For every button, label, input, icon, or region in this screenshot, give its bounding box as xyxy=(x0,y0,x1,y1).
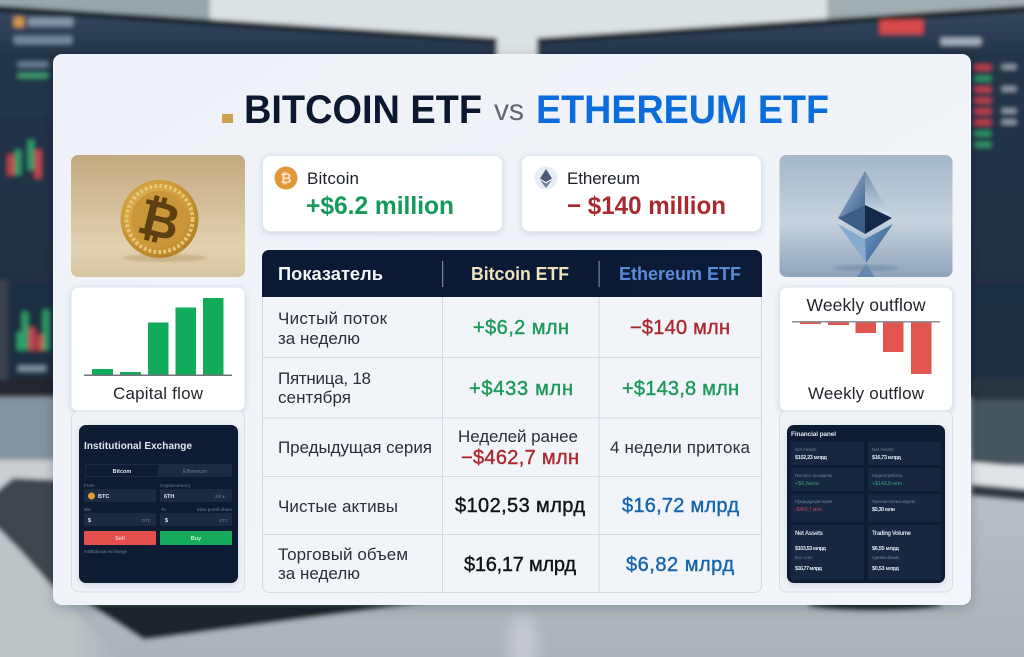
row: weekly trading volume: $16,17 млрд xyxy=(464,554,576,576)
row: weekly trading volume: $6,82 млрд xyxy=(626,554,734,576)
bars xyxy=(92,298,224,375)
card: financial panel screenshot: +$6,6млн xyxy=(795,481,819,487)
chart bottom label: Weekly outflow xyxy=(808,384,925,403)
row: friday 18 september: сентября xyxy=(278,388,351,407)
card: financial panel screenshot xyxy=(780,411,952,592)
card: financial panel screenshot: +$143,8 млн xyxy=(872,481,902,487)
stat card: bitcoin xyxy=(262,156,502,232)
row: friday 18 september: +$433 млн xyxy=(469,378,573,400)
card: financial panel screenshot: Net Assets xyxy=(795,447,817,452)
comparison table xyxy=(262,250,762,592)
card: financial panel screenshot: Financial panel xyxy=(791,431,836,438)
card: financial panel screenshot: $102,23 млрд xyxy=(795,455,828,461)
row: weekly trading volume xyxy=(278,545,734,583)
card: institutional exchange screenshot: Ethereum xyxy=(183,469,207,475)
card: institutional exchange screenshot: Institutional Exchange xyxy=(84,441,192,452)
row: previous streak: 4 недели притока xyxy=(610,438,751,457)
card: financial panel screenshot: Все счет. xyxy=(795,555,814,560)
card: institutional exchange screenshot: To xyxy=(161,507,166,512)
card: financial panel screenshot: -$460,7 млн xyxy=(795,507,822,513)
image: bitcoin coin xyxy=(71,155,245,277)
row: previous streak: −$462,7 млн xyxy=(461,447,579,469)
buy button: Buy xyxy=(191,536,202,542)
table header: Показатель xyxy=(278,264,383,284)
card: financial panel screenshot: $0,30 млн xyxy=(872,507,895,513)
card: financial panel screenshot: $6,55 млрд xyxy=(872,546,900,552)
stat card: ethereum: Ethereum xyxy=(567,169,640,188)
card: financial panel screenshot: $103,53 млрд xyxy=(795,546,826,552)
table header xyxy=(262,250,762,297)
row: net assets: $16,72 млрд xyxy=(622,495,739,517)
row: net assets: $102,53 млрд xyxy=(455,495,585,517)
card: institutional exchange screenshot: $ xyxy=(165,518,168,524)
chart: weekly outflow xyxy=(780,287,952,411)
buy button xyxy=(160,531,232,545)
row: net assets xyxy=(278,495,739,517)
row: friday 18 september: +$143,8 млн xyxy=(622,378,739,400)
stat card: bitcoin: Bitcoin xyxy=(307,169,359,188)
chart: capital flow xyxy=(71,287,245,411)
card: financial panel screenshot: $16,73 млрд xyxy=(872,455,902,461)
title: ETHEREUM ETF xyxy=(536,88,829,132)
row: previous streak: Неделей ранее xyxy=(458,427,578,446)
stat card: bitcoin: ₿ xyxy=(280,170,292,186)
card: institutional exchange screenshot: Slow ponsil share xyxy=(197,507,232,512)
card: financial panel screenshot: Поступл. за неделю xyxy=(795,473,833,478)
card: institutional exchange screenshot: BTC xyxy=(98,494,109,500)
title: vs xyxy=(494,94,524,127)
chart label: Capital flow xyxy=(113,384,204,403)
card: institutional exchange screenshot: 6TH xyxy=(164,494,174,500)
title: BITCOIN ETF xyxy=(244,88,482,132)
image: bitcoin coin: ₿ xyxy=(133,188,186,252)
row: previous streak xyxy=(278,427,751,469)
chart top label: Weekly outflow xyxy=(806,295,926,315)
stat card: ethereum xyxy=(522,156,762,232)
table header: Bitcoin ETF xyxy=(471,264,569,284)
card: financial panel screenshot: Net Assets xyxy=(795,531,824,537)
table header: Ethereum ETF xyxy=(619,264,741,284)
row: previous streak: Предыдущая серия xyxy=(278,438,432,457)
card: institutional exchange screenshot: Institutional exchange xyxy=(84,549,127,554)
card: institutional exchange screenshot: Bitcom xyxy=(113,469,131,475)
stat card: ethereum: − $140 million xyxy=(567,192,726,220)
card: institutional exchange screenshot: From xyxy=(84,483,95,488)
row: weekly net flow: −$140 млн xyxy=(630,317,730,339)
image: ethereum crystal xyxy=(780,155,952,277)
row: weekly net flow: за неделю xyxy=(278,329,360,348)
card: financial panel screenshot: Net Assets xyxy=(872,447,894,452)
title xyxy=(222,88,829,132)
desk left corner and keyboard xyxy=(0,520,130,657)
stat card: bitcoin: +$6.2 million xyxy=(306,192,454,220)
row: weekly net flow: Чистый поток xyxy=(278,309,388,328)
row: friday 18 september: Пятница, 18 xyxy=(278,369,371,388)
row: net assets: Чистые активы xyxy=(278,497,398,516)
card: financial panel screenshot: Притоки потока недели xyxy=(872,499,915,504)
main white panel xyxy=(53,54,971,605)
row: friday 18 september xyxy=(278,369,739,407)
row: weekly trading volume: за неделю xyxy=(278,564,360,583)
card: institutional exchange screenshot: $ xyxy=(88,518,91,524)
sell button: Sell xyxy=(115,536,125,542)
card: institutional exchange screenshot: Cryptocurrency xyxy=(160,483,191,488)
card: institutional exchange screenshot: UTC xyxy=(219,518,229,523)
card: financial panel screenshot: Предыдущая серия xyxy=(795,499,833,504)
card: financial panel screenshot: Trading Volume xyxy=(872,531,912,537)
card: institutional exchange screenshot xyxy=(72,411,244,592)
card: financial panel screenshot: $0,53 млрд xyxy=(872,566,900,572)
row: weekly trading volume: Торговый объем xyxy=(278,545,408,564)
row: weekly net flow: +$6,2 млн xyxy=(473,317,569,339)
card: financial panel screenshot: Сделать объема xyxy=(872,555,899,560)
card: financial panel screenshot: Неделя работы xyxy=(872,473,902,478)
row: weekly net flow xyxy=(278,309,730,348)
card: institutional exchange screenshot: 2/0 ▾ xyxy=(215,494,226,499)
card: financial panel screenshot: $16,77 млрд xyxy=(795,566,822,572)
card: institutional exchange screenshot: Bid xyxy=(84,507,91,512)
bars xyxy=(800,322,932,374)
sell button xyxy=(84,531,156,545)
card: institutional exchange screenshot: OTC xyxy=(142,518,152,523)
